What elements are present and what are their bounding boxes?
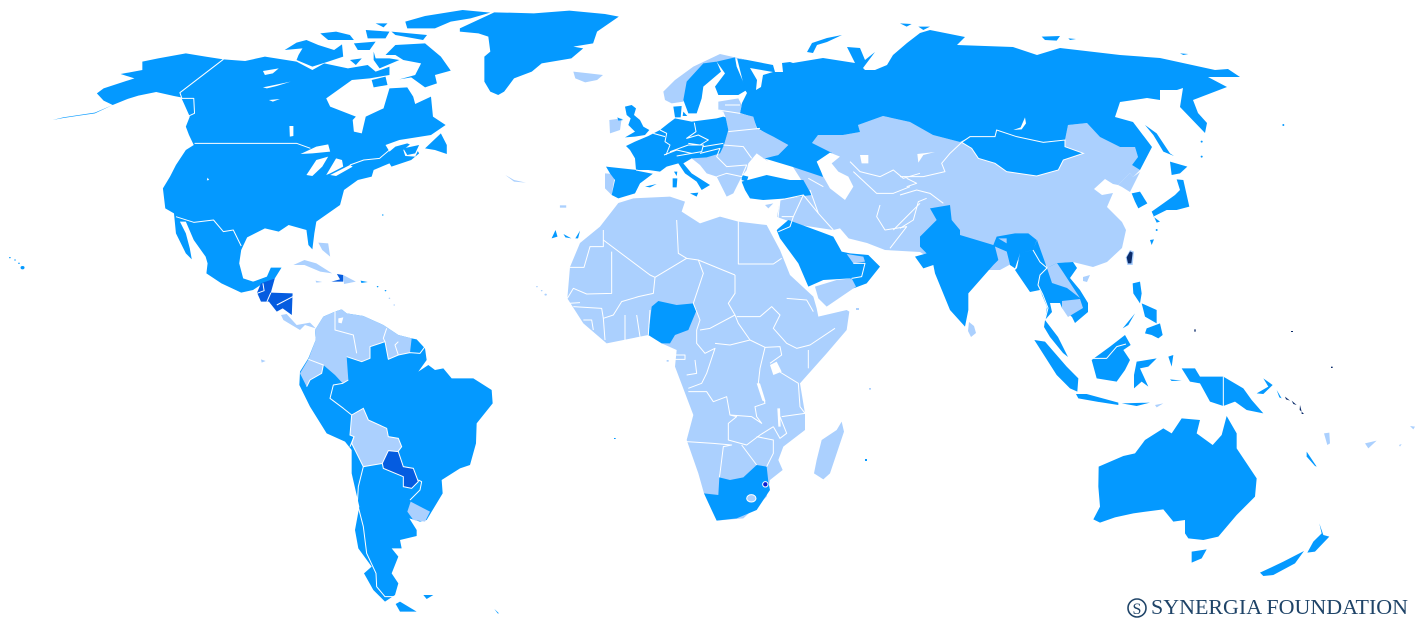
country: Costa Rica and Panama xyxy=(281,314,316,330)
North Korea xyxy=(1118,172,1140,192)
islands: Tierra del Fuego and Falklands xyxy=(261,359,499,613)
region: Southeast Asia and Oceania xyxy=(1034,282,1415,576)
islands: Pacific xyxy=(1324,426,1415,448)
country: Madagascar xyxy=(814,422,844,479)
island: Taiwan xyxy=(1126,250,1134,265)
region: Russia xyxy=(737,30,1240,177)
region: North America and Greenland xyxy=(9,10,619,315)
logo mark xyxy=(1128,599,1146,618)
country: New Zealand xyxy=(1260,523,1329,576)
island: Borneo xyxy=(1092,335,1131,382)
country: Japan xyxy=(1170,162,1187,175)
country: Lesotho xyxy=(747,495,756,502)
island: Java xyxy=(1076,394,1118,405)
country: Nigeria xyxy=(648,301,697,343)
logo: Synergia Foundation xyxy=(1128,595,1408,619)
region: Europe and Arabia xyxy=(605,54,920,288)
region: Central Asia, Middle East and China xyxy=(777,116,1140,282)
landmass: USA, Canada and Mexico xyxy=(53,53,446,293)
country: Spain xyxy=(606,167,653,198)
islands: Sicily, Sardinia, Corsica xyxy=(673,172,698,197)
country: Ecuador xyxy=(300,359,323,387)
region: Indochina xyxy=(1015,240,1088,357)
country: Cyprus xyxy=(765,203,773,208)
island: Sumatra xyxy=(1034,340,1078,392)
countries: Eastern Europe xyxy=(692,98,788,197)
region: South America xyxy=(261,309,499,613)
sea: White Sea xyxy=(750,68,773,90)
lakes xyxy=(207,68,419,180)
islands: Canadian Arctic xyxy=(285,10,490,155)
island: Sri Lanka xyxy=(968,322,976,337)
country: Portugal xyxy=(605,173,615,195)
continent: Africa xyxy=(567,197,849,521)
country: Paraguay xyxy=(382,451,418,488)
island: Iceland xyxy=(573,72,603,82)
country: Yemen xyxy=(815,278,856,307)
country: Bolivia xyxy=(350,408,402,467)
lake: Baikal xyxy=(1013,117,1026,130)
countries: Western and Central Europe xyxy=(626,117,728,190)
region: central Asia borders xyxy=(900,142,962,228)
country: South Korea xyxy=(1132,192,1147,208)
country: UAE xyxy=(847,254,865,263)
country: Bhutan xyxy=(998,238,1007,243)
country: Ireland xyxy=(609,118,622,133)
country: Cambodia xyxy=(1062,299,1083,317)
country: Laos xyxy=(1047,263,1080,298)
island: Novaya Zemlya xyxy=(807,35,842,53)
country: Denmark xyxy=(673,106,687,117)
country: South Africa xyxy=(704,465,770,521)
country: Turkey xyxy=(742,175,812,200)
region: Central America xyxy=(257,278,293,315)
borders: USA, Canada, Mexico xyxy=(176,59,389,246)
landmass: South America xyxy=(299,309,493,602)
logo mark: S xyxy=(1133,601,1141,618)
country: United Kingdom xyxy=(625,105,649,137)
borders: Africa xyxy=(567,220,835,477)
Indonesian and Melanesian islands xyxy=(1122,355,1317,467)
countries: Myanmar, Thailand, Vietnam, Malaysia xyxy=(1015,240,1088,357)
islands: Solomon Islands xyxy=(1194,329,1333,414)
region: Mongolia and north-east Asia islands xyxy=(900,23,1284,327)
islands: Hawaii xyxy=(9,257,25,269)
country: Philippines xyxy=(1123,282,1163,338)
islands: Indian Ocean xyxy=(614,308,871,461)
country: Bangladesh xyxy=(995,247,1010,265)
island: Tasmania xyxy=(1192,549,1207,563)
region: Africa xyxy=(567,197,871,521)
country: Swaziland xyxy=(763,482,768,487)
country: Sweden xyxy=(683,62,721,113)
country: India xyxy=(915,205,1037,327)
country: Nepal xyxy=(960,228,993,245)
Hainan xyxy=(1083,275,1090,282)
island: Sakhalin xyxy=(1145,125,1174,156)
island: Greenland xyxy=(460,11,619,95)
island: Sulawesi xyxy=(1134,358,1157,388)
country: Norway xyxy=(663,54,747,103)
African lakes xyxy=(757,362,782,427)
country: Australia xyxy=(1093,416,1257,540)
countries: Colombia, Venezuela, Guyana, Suriname xyxy=(308,309,412,383)
country: Mongolia xyxy=(962,130,1083,176)
country: Saudi Arabia and Oman xyxy=(777,220,880,288)
Arctic and Pacific islands xyxy=(900,23,1284,245)
country: Uruguay xyxy=(407,502,430,522)
logo wordmark: SYNERGIA FOUNDATION xyxy=(1151,595,1408,619)
Atlantic islands xyxy=(382,175,580,296)
borders: Europe and western Asia xyxy=(636,105,920,278)
region: Caribbean islands xyxy=(293,243,395,306)
borders: South America xyxy=(307,312,425,597)
lake: Maracaibo xyxy=(338,317,343,323)
island: New Guinea xyxy=(1182,368,1263,413)
country: Finland xyxy=(715,57,747,95)
lakes and gulf: Caspian, Aral, Persian Gulf xyxy=(817,153,868,257)
